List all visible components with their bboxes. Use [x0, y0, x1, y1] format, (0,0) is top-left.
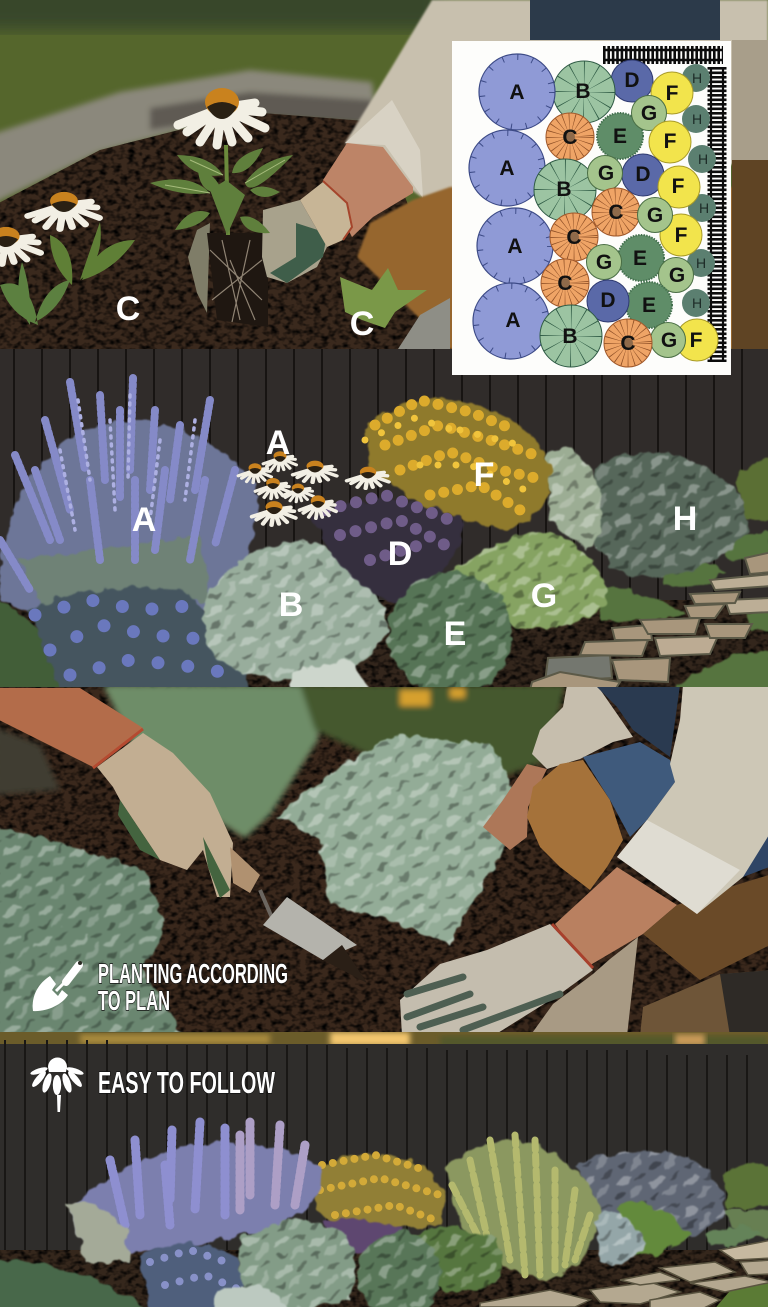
plan letters: G [669, 264, 685, 287]
hand trowel [230, 847, 367, 983]
bed soil and lawn [0, 459, 768, 692]
plant labels A to H: A [266, 424, 290, 462]
panel: labelled border planting [0, 349, 768, 696]
heading: planting according to plan: TO PLAN [98, 985, 170, 1016]
F: yellow yarrow [365, 399, 552, 530]
labels: C: C [116, 290, 140, 328]
A: tall lavender-blue perovskia [0, 378, 258, 625]
G: hosta [405, 1227, 502, 1295]
plan letters: A [509, 81, 525, 104]
plan letters: G [598, 162, 614, 185]
right arm and gloved hand [400, 764, 677, 1036]
F: yellow yarrow [312, 1155, 446, 1235]
plant labels A to H: H [673, 500, 697, 538]
coneflowers [238, 451, 389, 525]
stepping stone path [530, 552, 768, 690]
plan letters: H [698, 151, 708, 167]
plant labels A to H: B [279, 586, 303, 624]
labels: C [117, 296, 374, 336]
blue sea holly [30, 588, 250, 692]
plan letters: D [624, 69, 640, 92]
plant labels A to H: A [132, 501, 156, 539]
plan letters: F [666, 82, 679, 105]
root ball and gloved hand [188, 181, 450, 349]
dark fence [0, 1040, 768, 1264]
plan letters: F [675, 224, 688, 247]
plan letters: C [562, 126, 578, 149]
labels: C: C [350, 305, 374, 343]
plan letters: C [557, 272, 573, 295]
plan letters: G [596, 251, 612, 274]
plan letters: H [692, 295, 702, 311]
silver and lime shrubs [596, 1203, 760, 1265]
B: silver wormwood [205, 540, 388, 692]
plan letters: D [600, 289, 616, 312]
coneflower plants [0, 145, 427, 328]
D: purple allium [322, 1218, 402, 1256]
plan letters: E [642, 294, 656, 317]
plant labels A to H: F [474, 456, 494, 494]
plan letters: F [664, 130, 677, 153]
kneeling gardener [527, 685, 768, 1036]
plan letters: C [566, 226, 582, 249]
plan letters: E [633, 247, 647, 270]
dark wooden fence [0, 349, 768, 600]
plant labels A to H [132, 424, 697, 653]
plan letters: H [696, 255, 706, 271]
B: silver wormwood [215, 1221, 355, 1307]
plan letters: F [672, 175, 685, 198]
tall lamb's ear clump [447, 1135, 602, 1282]
E: round green mound [388, 572, 512, 696]
soil, lawn and path [0, 1210, 768, 1307]
left arm and glove [0, 688, 233, 898]
plan letters: A [505, 309, 521, 332]
stone border [0, 70, 378, 205]
plan letters: H [699, 200, 709, 216]
coneflower blooms [0, 88, 265, 264]
plan letters: B [562, 325, 578, 348]
mulch bed [0, 687, 768, 1032]
plan letters: D [635, 163, 651, 186]
heading: planting according to plan: PLANTING ACCORDING [98, 958, 288, 989]
plan plants [469, 54, 718, 367]
D: dark purple allium [312, 495, 465, 605]
plan fence [603, 50, 723, 362]
plant labels A to H: G [531, 577, 557, 615]
plan letters: F [690, 329, 703, 352]
lawn background [0, 0, 768, 349]
plan letters: H [692, 70, 702, 86]
G: hosta [450, 530, 605, 630]
plan letters: G [647, 204, 663, 227]
plan letters: A [507, 235, 523, 258]
plant labels A to H: E [444, 615, 466, 653]
B: silver wormwood being planted [275, 735, 525, 945]
lamb's ear spires [545, 448, 603, 550]
blue sea holly [140, 1244, 245, 1307]
A: lavender perovskia [68, 1122, 320, 1262]
plan letters [499, 69, 709, 355]
plan letters: C [608, 201, 624, 224]
plan letters: E [613, 125, 627, 148]
plant labels A to H: D [388, 535, 412, 573]
bed soil [0, 112, 460, 349]
plan letters: B [556, 178, 572, 201]
icon: trowel [33, 961, 82, 1011]
plan letters: H [692, 111, 702, 127]
H: background sage [575, 1151, 768, 1238]
heading: planting according to plan [98, 963, 288, 1011]
plan letters: B [575, 80, 591, 103]
plan letters: G [641, 102, 657, 125]
plan letters: A [499, 157, 515, 180]
foreground lamb's ear plant [0, 825, 185, 1036]
plan letters: C [620, 332, 636, 355]
gardener: shirt, denim, trousers and forearm [323, 0, 768, 349]
sunset sky strip [0, 1032, 768, 1044]
plan letters: G [661, 329, 677, 352]
H: dark sage clump [590, 451, 748, 578]
heading: easy to follow: EASY TO FOLLOW [98, 1065, 275, 1100]
E: round mound [358, 1232, 442, 1307]
blurred background plants [0, 685, 565, 838]
panel: planting the coneflower [0, 0, 768, 349]
inset: garden layout plan [452, 41, 731, 375]
panel: finished garden, easy to follow [0, 1032, 768, 1307]
panel: planting according to plan [0, 685, 768, 1036]
icon: coneflower [30, 1058, 84, 1112]
